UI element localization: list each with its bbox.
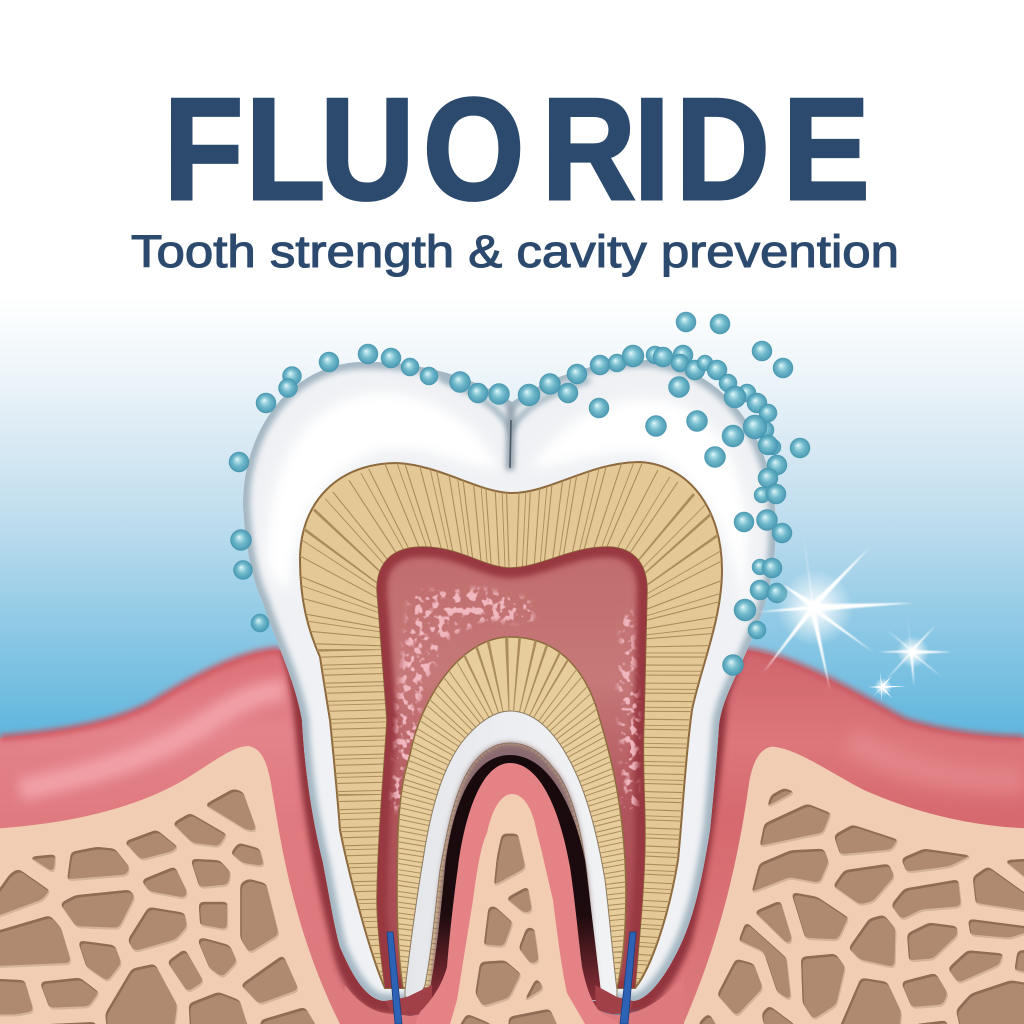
bone right [681,747,1024,1024]
subtitle: Tooth strength & cavity prevention [131,226,899,277]
blood vessel left [387,932,402,1024]
title: FLUORIDE [164,69,870,231]
root socket shadow [280,650,745,1014]
central gap and gum arch [340,743,684,1024]
gum right [640,650,1024,1024]
enamel rim and gloss [243,360,776,1001]
blood vessel right [620,932,636,1024]
tooth [243,360,776,1014]
enamel [243,360,776,1001]
trabecular cells right [699,788,1024,1024]
sparkle medium [878,617,952,686]
pulp shading and speckles [370,540,660,988]
inner dentin tubules [405,711,617,1000]
sparkle small [868,672,906,702]
pulp chamber [377,547,647,988]
trabecular cells left [0,788,320,1024]
dentin [300,462,722,988]
inner enamel arch [405,711,617,998]
inner dentin arch [397,637,626,988]
gum between roots [340,975,684,1024]
central trabecular cells [457,833,560,1024]
fluoride particles [229,312,810,676]
gum left [0,650,400,1024]
dentin tubules [377,555,647,1000]
sparkle large [757,533,913,690]
bone left [0,746,340,1024]
